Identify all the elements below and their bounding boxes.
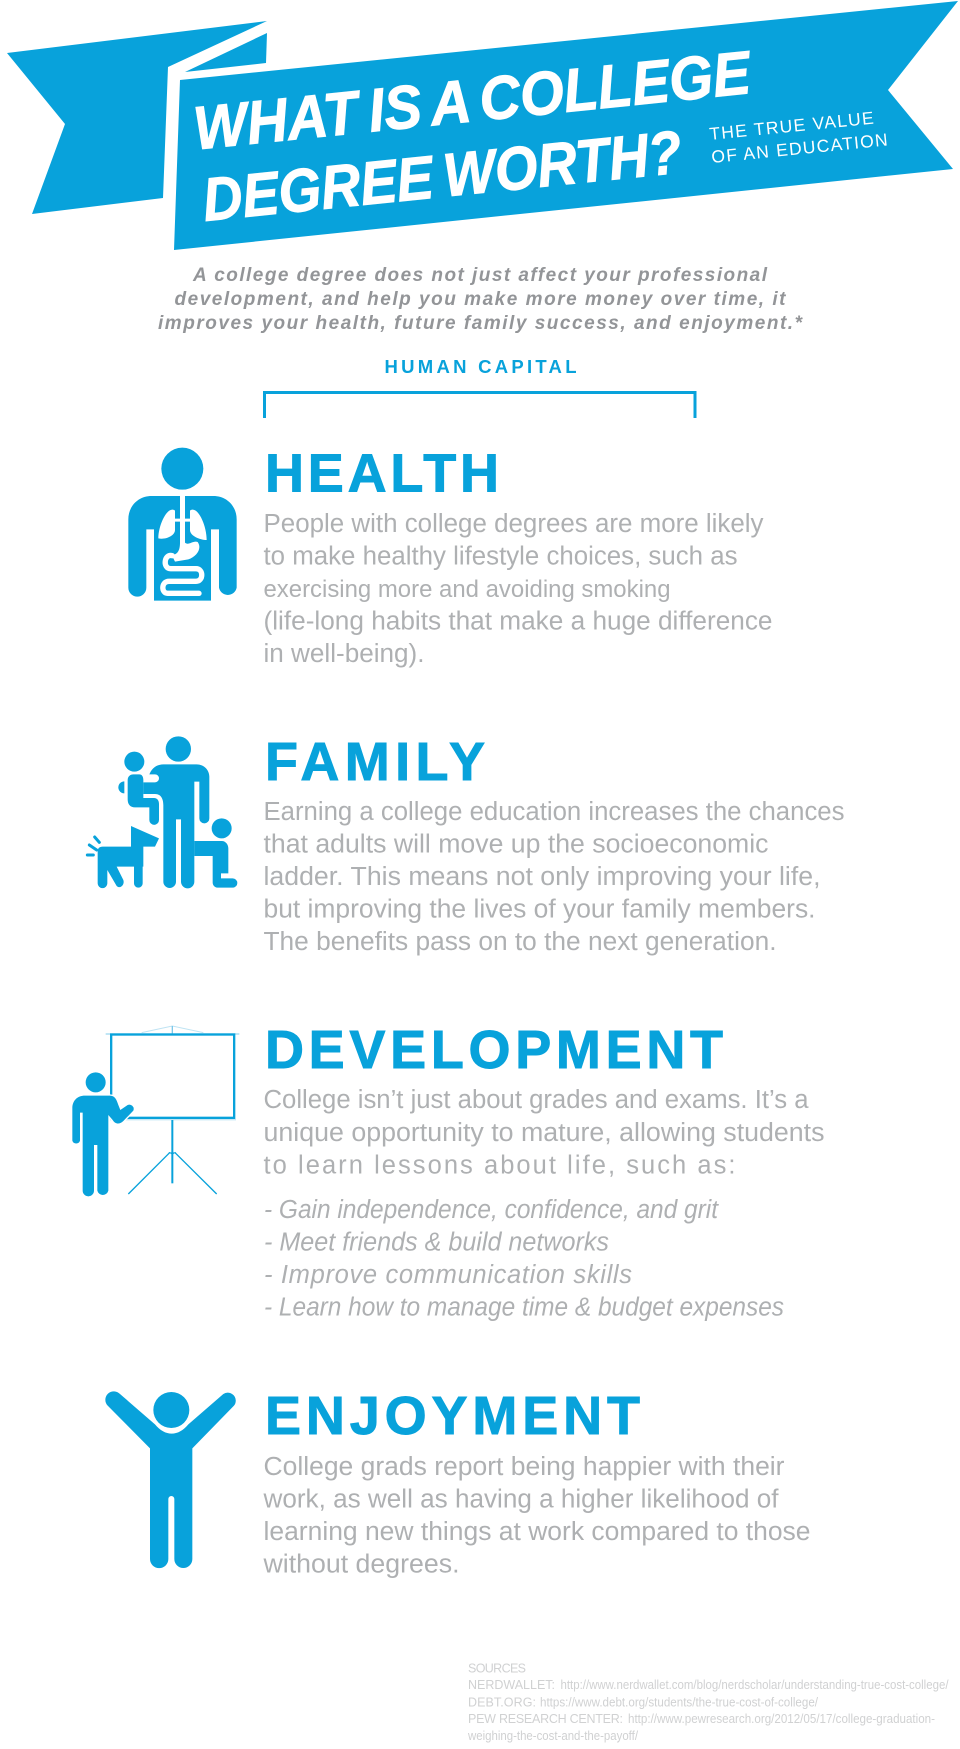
text: family [264, 798, 844, 956]
text: development [264, 1086, 824, 1180]
intro text: improves your health, future family success, and enjoyment.* [158, 313, 804, 334]
icon: person with raised arms [105, 1391, 236, 1568]
intro text: development, and help you make more money over time, it [174, 289, 786, 310]
sources: SOURCES [468, 1662, 526, 1676]
title: WHAT IS A COLLEGE [190, 38, 756, 162]
sources: weighing-the-cost-and-the-payoff/ [467, 1729, 638, 1743]
text: health: People with college degrees are more likely [264, 510, 764, 538]
text: health [264, 510, 772, 668]
title: DEGREE WORTH? [199, 118, 685, 234]
text: enjoyment [262, 1453, 810, 1578]
sources [467, 1662, 949, 1743]
heading: health: HEALTH [265, 444, 499, 504]
text: development: College isn’t just about grades and exams. It’s a [264, 1086, 809, 1114]
subtitle [708, 108, 889, 167]
intro text: A college degree does not just affect your professional [192, 265, 768, 286]
sources: http://www.pewresearch.org/2012/05/17/college-graduation- [628, 1712, 935, 1726]
sources: NERDWALLET: [468, 1678, 555, 1692]
subtitle: OF AN EDUCATION [710, 129, 889, 167]
text: family: Earning a college education increases the chances [264, 798, 844, 826]
subtitle: THE TRUE VALUE [708, 108, 875, 144]
list: development [264, 1196, 784, 1322]
text: enjoyment: work, as well as having a higher likelihood of [262, 1486, 779, 1514]
list: development: - Gain independence, confidence, and grit [264, 1196, 719, 1224]
text: family: The benefits pass on to the next generation. [264, 928, 776, 956]
heading: development: DEVELOPMENT [265, 1020, 723, 1080]
intro text [158, 265, 804, 334]
text: health: in well-being). [264, 640, 424, 668]
icon: family [87, 736, 237, 888]
text: health: to make healthy lifestyle choices, such as [264, 542, 738, 570]
text: development: to learn lessons about life, such as: [264, 1152, 736, 1180]
text: enjoyment: College grads report being happier with their [264, 1453, 785, 1481]
human capital bracket [264, 392, 695, 418]
list: development: - Learn how to manage time & budget expenses [264, 1294, 784, 1322]
text: family: ladder. This means not only improving your life, [264, 863, 820, 891]
text: health: (life-long habits that make a huge difference [264, 608, 772, 636]
sources: PEW RESEARCH CENTER: [468, 1712, 623, 1726]
heading: enjoyment: ENJOYMENT [265, 1386, 640, 1446]
human capital label: HUMAN CAPITAL [384, 356, 576, 377]
icon: health body [128, 448, 237, 601]
banner ribbon [7, 1, 958, 250]
text: family: that adults will move up the socioeconomic [264, 830, 769, 858]
text: development: unique opportunity to mature, allowing students [264, 1119, 824, 1147]
icon: presenter with projection screen [72, 1026, 239, 1196]
sources: DEBT.ORG: [468, 1696, 536, 1710]
text: family: but improving the lives of your family members. [264, 896, 816, 924]
title [190, 38, 756, 234]
list: development: - Meet friends & build networks [264, 1228, 609, 1256]
list: development: - Improve communication skills [264, 1261, 632, 1289]
heading: family: FAMILY [265, 732, 485, 792]
text: enjoyment: learning new things at work compared to those [264, 1518, 810, 1546]
text: enjoyment: without degrees. [262, 1550, 460, 1578]
text: health: exercising more and avoiding smoking [264, 576, 670, 603]
sources: https://www.debt.org/students/the-true-cost-of-college/ [540, 1696, 818, 1710]
